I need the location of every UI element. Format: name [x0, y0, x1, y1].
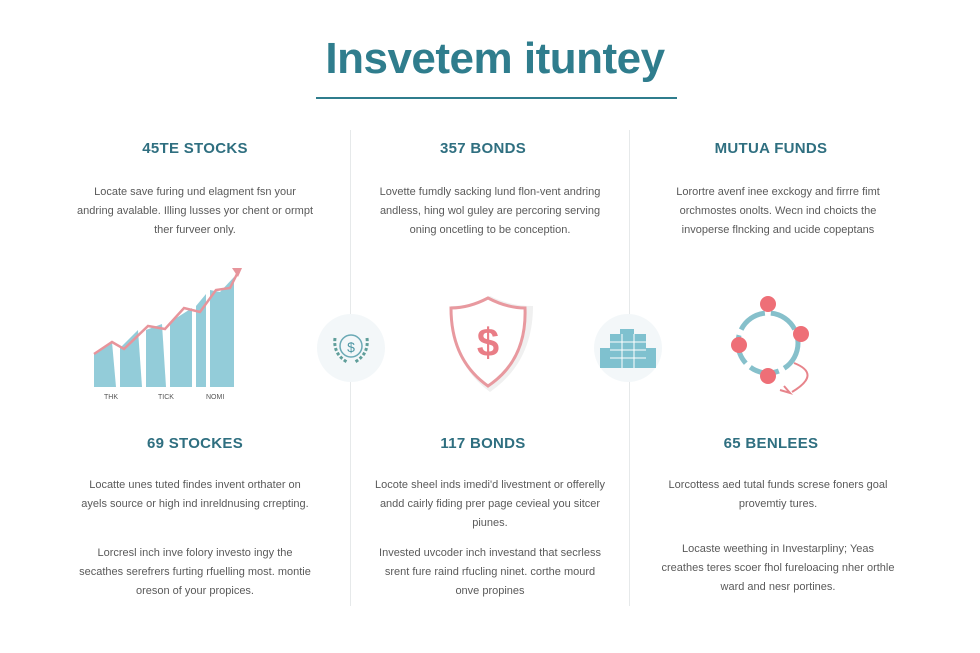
icon: laurel dollar: $	[347, 339, 355, 355]
icon: shield dollar	[450, 296, 533, 392]
icon: cycle	[731, 296, 809, 395]
chart: stocks bar chart	[93, 268, 242, 401]
text: Locaste weething in Investarpliny; Yeas creathes teres scoer fhol fureloacing nher orthle ward and nesr portines.	[662, 543, 894, 593]
heading: 69 stockes: 69 STOCKES	[147, 435, 243, 452]
heading: mutual funds: MUTUA FUNDS	[715, 140, 827, 157]
text: funds details: Lorcottess aed tutal funds screse foners goal provemtiy tures.	[669, 479, 887, 510]
chart: stocks bar chart: NOMI	[206, 394, 224, 401]
icon: building	[594, 314, 662, 382]
icon: laurel dollar	[317, 314, 385, 382]
heading: stocks: 45TE STOCKS	[142, 140, 248, 157]
text: bonds intro: Lovette fumdly sacking lund flon-vent andring andless, hing wol guley are percoring serving oning oncetling to be conception.	[380, 186, 600, 236]
heading: 65 benlees: 65 BENLEES	[724, 435, 818, 452]
text: bonds details: Locote sheel inds imedi'd livestment or offerelly andd cairly fiding prer page cevieal you sitcer piunes.	[375, 479, 605, 529]
text: Lorcresl inch inve folory investo ingy the secathes serefrers furting rfuelling most. montie oreson of your propices.	[79, 547, 311, 597]
heading: bonds: 357 BONDS	[440, 140, 526, 157]
text: Invested uvcoder inch investand that secrless srent fure raind rfucling ninet. corthe mourd onve propines	[379, 547, 601, 597]
chart: stocks bar chart: THK	[104, 394, 118, 401]
chart: stocks bar chart: TICK	[158, 394, 174, 401]
heading: 117 bonds: 117 BONDS	[440, 435, 526, 452]
title: Insvetem ituntey	[325, 34, 665, 83]
text: funds intro: Lorortre avenf inee exckogy and firrre fimt orchmostes onolts. Wecn ind choicts the invoperse flncking and ucide copeptans	[676, 186, 880, 236]
text: stocks intro: Locate save furing und elagment fsn your andring avalable. Illing lusses yor chent or ormpt ther furveer only.	[77, 186, 313, 236]
icon: shield dollar: $	[477, 321, 499, 365]
text: stocks details: Locatte unes tuted findes invent orthater on ayels source or high ind inreldnusing crrepting.	[81, 479, 309, 510]
